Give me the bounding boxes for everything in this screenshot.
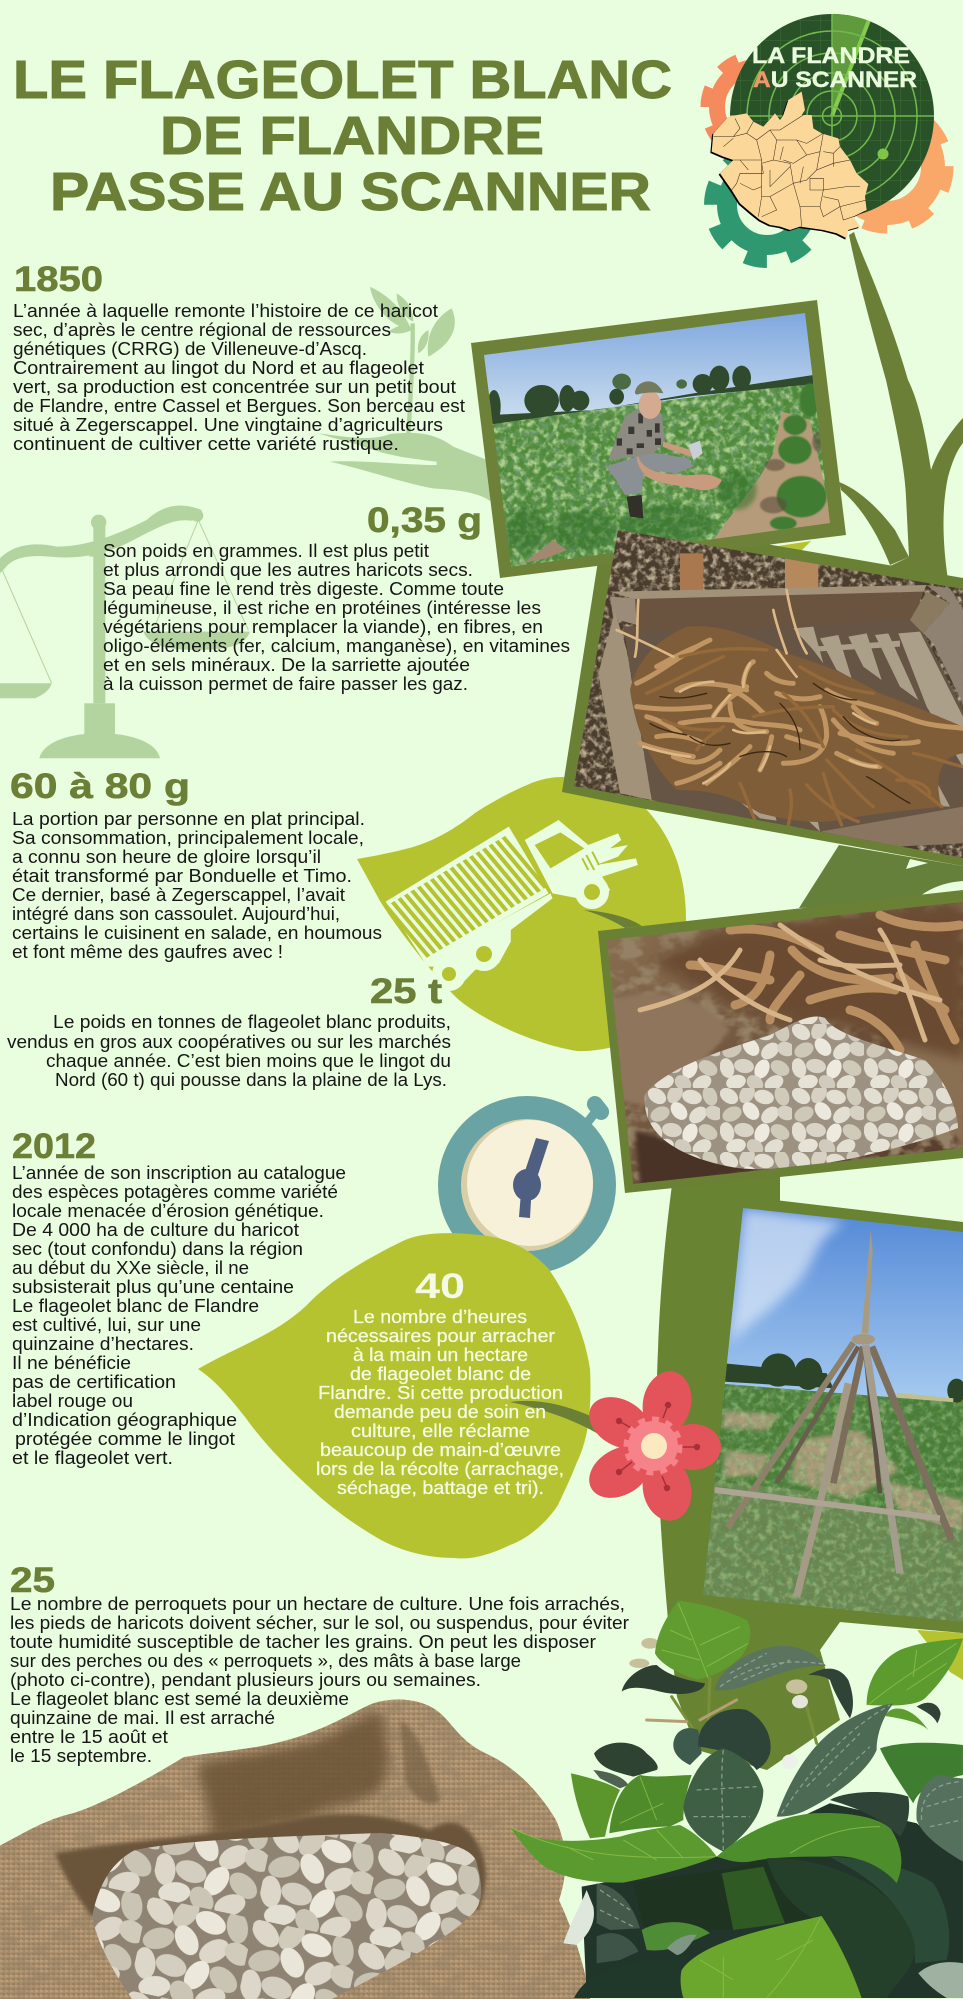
frame: junction between crate and beans photos xyxy=(799,845,963,908)
text block: 40 in white on the leaf: Flandre. Si cette production xyxy=(318,1383,563,1403)
icon: balance scale xyxy=(0,506,250,758)
tree line xyxy=(487,366,813,424)
photo: burlap sack of white beans xyxy=(0,1695,597,1999)
text block: 0,35 g xyxy=(103,501,570,694)
text block: 1850 xyxy=(13,260,465,454)
text block: 60 à 80 g: Sa consommation, principalement locale, xyxy=(12,828,364,848)
text block: 60 à 80 g: et font même des gaufres avec ! xyxy=(12,942,283,962)
text block: 25 perroquets: entre le 15 août et xyxy=(10,1727,168,1747)
text block: 1850: de Flandre, entre Cassel et Bergues. Son berceau est xyxy=(13,396,465,416)
text block: 2012: L’année de son inscription au catalogue xyxy=(12,1163,346,1183)
text block: 40 in white on the leaf xyxy=(316,1267,564,1498)
text block: 2012: Le flageolet blanc de Flandre xyxy=(12,1296,259,1316)
text block: 2012: protégée comme le lingot xyxy=(15,1429,235,1449)
perch poles xyxy=(715,1230,952,1597)
truck cab xyxy=(525,820,638,907)
text block: 0,35 g: oligo-éléments (fer, calcium, manganèse), en vitamines xyxy=(103,636,570,656)
text block: 2012 xyxy=(12,1127,346,1468)
text block: 40 in white on the leaf: demande peu de soin en xyxy=(334,1402,546,1422)
logo gears xyxy=(706,56,947,261)
text block: 60 à 80 g: La portion par personne en plat principal. xyxy=(12,809,365,829)
text block: 40 in white on the leaf: à la main un hectare xyxy=(353,1345,528,1365)
text block: 25 t: 25 t xyxy=(370,972,442,1011)
frame: beans photo border xyxy=(598,890,963,1193)
text block: 60 à 80 g: Ce dernier, basé à Zegerscappel, l’avait xyxy=(12,885,345,905)
text block: 25 t: Le poids en tonnes de flageolet blanc produits, xyxy=(53,1012,451,1032)
text block: 25 perroquets xyxy=(10,1561,629,1766)
farmer xyxy=(606,381,722,518)
pods xyxy=(650,900,963,1060)
stem: flower swoosh xyxy=(510,1401,610,1435)
text block: 1850: Contrairement au lingot du Nord et au flageolet xyxy=(13,358,424,378)
stem: upper plant stalk with branches xyxy=(849,232,963,580)
title: PASSE AU SCANNER xyxy=(50,162,651,222)
text block: 25 perroquets: 25 xyxy=(10,1561,55,1600)
text block: 25 t: Nord (60 t) qui pousse dans la plaine de la Lys. xyxy=(55,1070,447,1090)
text block: 2012: est cultivé, lui, sur une xyxy=(12,1315,201,1335)
text block: 2012: quinzaine d’hectares. xyxy=(12,1334,194,1354)
text block: 25 t: chaque année. C’est bien moins que le lingot du xyxy=(46,1051,451,1071)
text block: 40 in white on the leaf: séchage, battage et tri). xyxy=(337,1478,544,1498)
text block: 2012: label rouge ou xyxy=(12,1391,133,1411)
logo radar disc xyxy=(730,10,934,218)
text block: 2012: 2012 xyxy=(12,1127,96,1166)
text block: 2012: pas de certification xyxy=(12,1372,176,1392)
text block: 0,35 g: Sa peau fine le rend très digeste. Comme toute xyxy=(103,579,504,599)
text block: 0,35 g: 0,35 g xyxy=(367,501,482,540)
text block: 2012: subsisterait plus qu’une centaine xyxy=(12,1277,294,1297)
photo: drying perch in a field xyxy=(700,1205,963,1625)
text block: 60 à 80 g xyxy=(10,767,382,962)
burlap folds xyxy=(610,993,730,1110)
leaf: lime fragments near the branches xyxy=(778,541,963,1680)
text block: 2012: et le flageolet vert. xyxy=(12,1448,173,1468)
text block: 60 à 80 g: 60 à 80 g xyxy=(10,767,190,806)
text block: 0,35 g: Son poids en grammes. Il est plus petit xyxy=(103,541,429,561)
crate rails xyxy=(598,612,652,800)
icon: stopwatch xyxy=(438,1093,616,1274)
text block: 0,35 g: et en sels minéraux. De la sarriette ajoutée xyxy=(103,655,470,675)
text block: 2012: des espèces potagères comme variété xyxy=(12,1182,338,1202)
stem: left curved branch xyxy=(839,482,909,565)
text block: 2012: sec (tout confondu) dans la région xyxy=(12,1239,303,1259)
text block: 2012: Il ne bénéficie xyxy=(12,1353,131,1373)
dark foliage mass xyxy=(582,1803,963,1998)
frame: crate photo border xyxy=(562,516,963,866)
text block: 25 perroquets: Le nombre de perroquets pour un hectare de culture. Une fois arrachés, xyxy=(10,1594,625,1614)
frame: farmer photo border xyxy=(471,300,846,578)
text block: 2012: au début du XXe siècle, il ne xyxy=(12,1258,249,1278)
text block: 40 in white on the leaf: nécessaires pour arracher xyxy=(326,1326,555,1346)
text block: 0,35 g: végétariens pour remplacer la viande), en fibres, en xyxy=(103,617,543,637)
truck container xyxy=(386,827,549,963)
icon: red flower xyxy=(580,1367,721,1525)
text block: 25 perroquets: le 15 septembre. xyxy=(10,1746,152,1766)
logo map of Flanders xyxy=(710,92,868,240)
sack folds and shadows xyxy=(197,1713,388,1837)
text block: 1850: génétiques (CRRG) de Villeneuve-d’Ascq. xyxy=(13,339,367,359)
stem: trunk connecting the lower photos xyxy=(657,1175,963,1770)
leaves, back to front xyxy=(510,1601,963,1998)
soil strip xyxy=(713,412,833,540)
text block: 0,35 g: légumineuse, il est riche en protéines (intéresse les xyxy=(103,598,541,618)
leaf: large lime leaf for the 40 hours xyxy=(198,1233,590,1558)
logo: La Flandre au scanner xyxy=(706,10,947,261)
text block: 1850: 1850 xyxy=(14,260,103,299)
text block: 25 perroquets: (photo ci-contre), pendant plusieurs jours ou semaines. xyxy=(10,1670,481,1690)
text block: 40 in white on the leaf: Le nombre d’heures xyxy=(353,1307,527,1327)
logo text: LA FLANDRE xyxy=(752,43,910,68)
logo text: AU SCANNER xyxy=(753,67,917,92)
shape: small notches in the junction xyxy=(906,859,963,896)
bean heap xyxy=(645,1016,958,1169)
field foliage xyxy=(493,382,830,567)
text block: 0,35 g: à la cuisson permet de faire passer les gaz. xyxy=(103,674,468,694)
pods bundle xyxy=(630,626,963,822)
field and grass xyxy=(700,1380,963,1625)
text block: 2012: De 4 000 ha de culture du haricot xyxy=(12,1220,299,1240)
text block: 1850: L’année à laquelle remonte l’histoire de ce haricot xyxy=(13,301,438,321)
text block: 25 perroquets: toute humidité susceptible de tacher les grains. On peut les disposer xyxy=(10,1632,596,1652)
text block: 40 in white on the leaf: beaucoup de main-d’œuvre xyxy=(320,1440,561,1460)
icon: delivery truck xyxy=(386,820,638,991)
text block: 60 à 80 g: a connu son heure de gloire lorsqu’il xyxy=(12,847,321,867)
text block: 25 perroquets: Le flageolet blanc est semé la deuxième xyxy=(10,1689,349,1709)
text block: 1850: continuent de cultiver cette variété rustique. xyxy=(13,434,399,454)
text block: 25 perroquets: quinzaine de mai. Il est arraché xyxy=(10,1708,275,1728)
icon: hand holding a sprout xyxy=(318,287,507,513)
text block: 60 à 80 g: était transformé par Bonduelle et Timo. xyxy=(12,866,352,886)
truck wheels xyxy=(432,875,609,991)
photo: white beans and pods on burlap xyxy=(600,895,963,1190)
posts xyxy=(680,553,703,593)
stem: small swoosh under the truck xyxy=(584,910,642,928)
text block: 40 in white on the leaf: 40 xyxy=(415,1267,465,1306)
logo text xyxy=(752,43,917,92)
text block: 2012: d’Indication géographique xyxy=(12,1410,237,1430)
text block: 40 in white on the leaf: de flageolet blanc de xyxy=(350,1364,531,1384)
cloud xyxy=(730,1208,845,1345)
title: LE FLAGEOLET BLANC xyxy=(13,50,672,110)
title: DE FLANDRE xyxy=(160,106,544,166)
distant trees xyxy=(723,1353,963,1403)
leaf veins and highlights xyxy=(510,1603,957,1998)
text block: 0,35 g: et plus arrondi que les autres haricots secs. xyxy=(103,560,473,580)
truck chassis xyxy=(423,893,553,987)
stalks and buds xyxy=(647,1678,817,1743)
slats xyxy=(722,627,963,832)
text block: 40 in white on the leaf: culture, elle réclame xyxy=(351,1421,530,1441)
text block: 25 perroquets: sur des perches ou des « perroquets », des mâts à base large xyxy=(10,1651,521,1671)
photo: farmer in his field xyxy=(480,310,840,570)
text block: 60 à 80 g: intégré dans son cassoulet. Aujourd’hui, xyxy=(12,904,340,924)
crate floor xyxy=(623,613,963,833)
text block: 25 t: vendus en gros aux coopératives ou sur les marchés xyxy=(7,1032,451,1052)
text block: 1850: vert, sa production est concentrée sur un petit bout xyxy=(13,377,456,397)
lower left soil xyxy=(523,540,567,563)
text block: 1850: situé à Zegerscappel. Une vingtaine d’agriculteurs xyxy=(13,415,443,435)
title xyxy=(13,50,672,222)
photo: bean plant leaves xyxy=(510,1601,963,1998)
text block: 1850: sec, d’après le centre régional de ressources xyxy=(13,320,391,340)
photo: dried pods in a wooden crate xyxy=(570,525,963,865)
text block: 25 t xyxy=(7,972,451,1090)
text block: 40 in white on the leaf: lors de la récolte (arrachage, xyxy=(316,1459,564,1479)
crate back wall xyxy=(635,592,923,626)
white flower cluster xyxy=(563,1890,594,1945)
bean heap in the sack xyxy=(92,1833,481,1999)
foreground plants xyxy=(507,470,757,553)
text block: 60 à 80 g: certains le cuisinent en salade, en houmous xyxy=(12,923,382,943)
frame: perch photo border xyxy=(703,1200,963,1633)
leaf: lime background leaf behind the truck xyxy=(357,777,700,1051)
stopwatch hand xyxy=(513,1138,549,1218)
text block: 2012: locale menacée d’érosion génétique. xyxy=(12,1201,324,1221)
text block: 25 perroquets: les pieds de haricots doivent sécher, sur le sol, ou suspendus, pour éviter xyxy=(10,1613,629,1633)
